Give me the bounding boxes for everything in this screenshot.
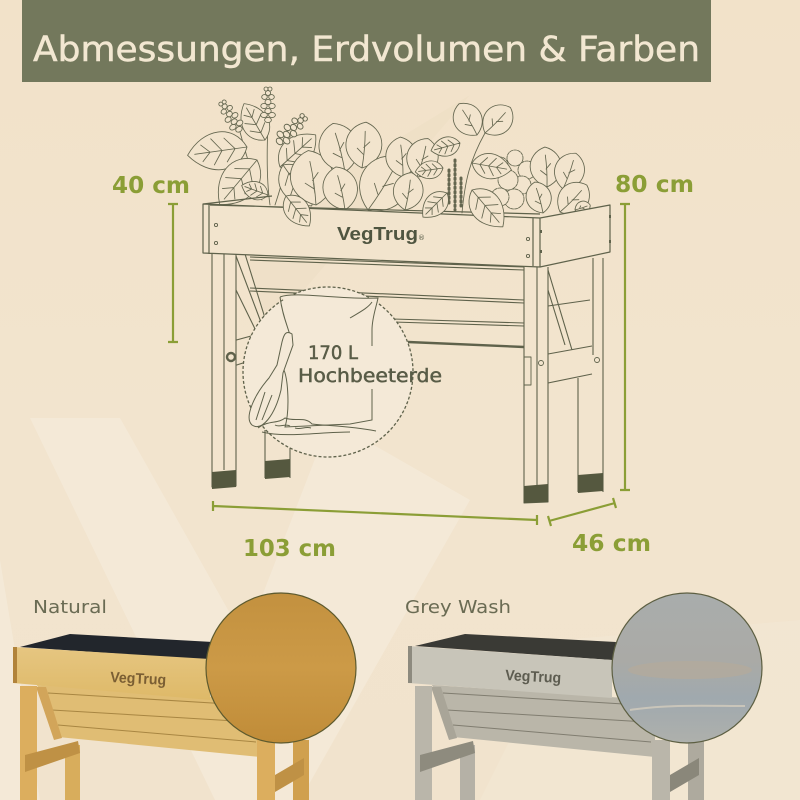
soil callout circle [243, 287, 442, 457]
natural trug photo: VegTrug [110, 669, 167, 689]
grey trug photo [408, 634, 704, 800]
dimension: depth 46 cm [548, 498, 651, 557]
line drawing: trug [203, 196, 610, 503]
soil pile [258, 418, 376, 435]
title: Abmessungen, Erdvolumen & Farben [33, 30, 700, 70]
kale and right spinach [491, 146, 597, 222]
back leg feet [265, 459, 290, 479]
dimension: depth 46 cm: 46 cm [572, 531, 651, 557]
right front foot [524, 484, 548, 503]
left herb leaves, rear [233, 97, 326, 215]
soil label: Hochbeeterde [298, 365, 442, 387]
back legs [265, 258, 603, 493]
soil volume: 170 L [308, 342, 358, 364]
dimension: width 103 cm [213, 501, 537, 562]
front legs [212, 253, 548, 503]
soil bag [280, 295, 378, 427]
overhanging leaves [277, 180, 514, 236]
dimension: height 80 cm: 80 cm [615, 172, 694, 198]
trough slats [250, 257, 524, 326]
title banner [22, 0, 711, 82]
panel: Grey Wash colour [405, 593, 762, 800]
left side brace [218, 254, 265, 371]
line drawing: plants [185, 87, 597, 223]
logo mark: ® [418, 234, 425, 242]
upper box [203, 196, 610, 267]
logo: VegTrug on box: VegTrug [337, 224, 418, 244]
dimension: height 40 cm: 40 cm [112, 173, 190, 199]
dimension: width 103 cm: 103 cm [243, 536, 336, 562]
icon: flower spikes [215, 87, 311, 149]
natural wood swatch [206, 593, 356, 743]
grey wood swatch [612, 593, 762, 743]
left front foot [212, 470, 236, 489]
natural trug photo [13, 634, 309, 800]
left herb leaves [185, 128, 271, 216]
label: Grey Wash: Grey Wash [405, 597, 511, 618]
panel: Natural colour [13, 593, 356, 800]
right side brace [548, 270, 592, 383]
dimension: height 80 cm [615, 172, 694, 490]
trowel [249, 332, 293, 427]
dimension: height 40 cm [112, 173, 190, 342]
grey trug photo: VegTrug [505, 667, 562, 687]
box bolts [214, 215, 610, 385]
spinach leaves [287, 119, 443, 223]
label: Natural: Natural [33, 597, 107, 618]
basil and berries [414, 97, 520, 210]
